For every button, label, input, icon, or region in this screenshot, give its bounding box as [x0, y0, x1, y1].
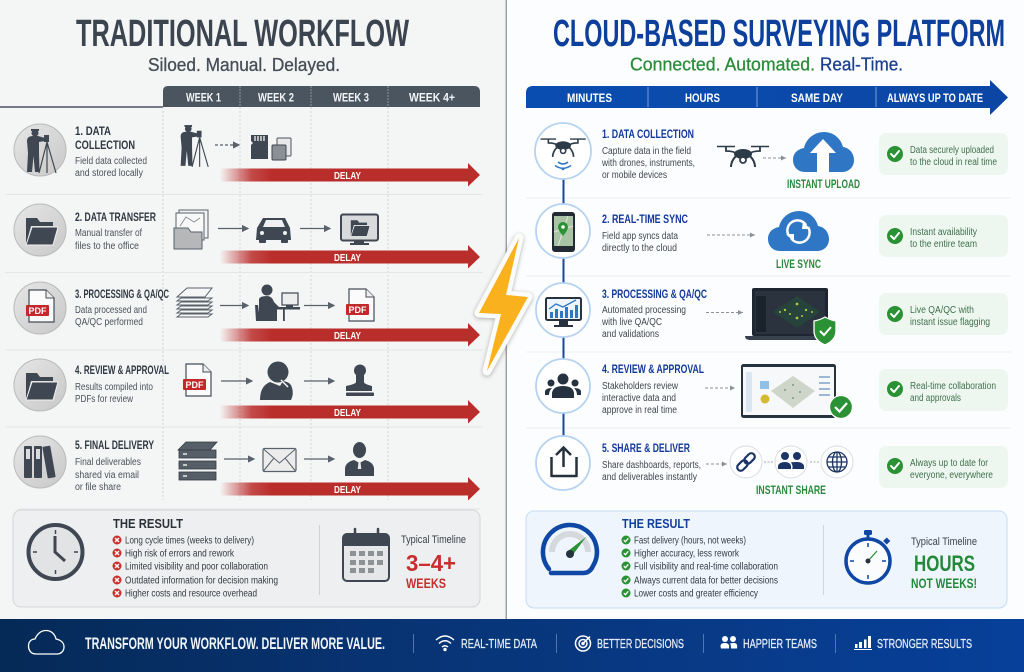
step description: or mobile devices — [602, 170, 667, 181]
result list: Fast delivery (hours, not weeks) — [634, 536, 746, 546]
benefit card — [879, 215, 1008, 257]
icon: sync cloud — [768, 211, 829, 251]
result list: Higher accuracy, less rework — [634, 548, 740, 560]
typical timeline value: HOURS — [914, 551, 975, 576]
icon: wifi — [436, 636, 454, 650]
icon: target — [576, 636, 590, 651]
left timeline header: WEEK 1 — [186, 90, 221, 104]
right timeline arrow — [526, 80, 1008, 115]
left row 5: final delivery — [14, 436, 480, 500]
right timeline arrow: SAME DAY — [791, 91, 843, 105]
left timeline header: WEEK 2 — [258, 90, 294, 104]
footer label: HAPPIER TEAMS — [743, 637, 817, 651]
right timeline arrow: HOURS — [685, 91, 720, 105]
panel: cloud result — [526, 511, 1007, 608]
icon: memory cards — [251, 135, 291, 160]
arrow — [300, 228, 330, 230]
arrow — [763, 157, 786, 159]
icon: pdf badge — [14, 282, 66, 334]
step description: and stored locally — [75, 168, 143, 179]
right row 2: real-time sync — [536, 204, 1008, 271]
step description: files to the office — [75, 241, 139, 252]
icon: drone badge — [535, 123, 591, 179]
benefit card: and approvals — [910, 393, 961, 404]
step heading: 3. PROCESSING & QA/QC — [75, 289, 169, 301]
arrow — [224, 458, 254, 460]
result list: Limited visibility and poor collaboration — [125, 562, 268, 572]
left row 1: data collection — [14, 124, 480, 186]
icon: lightning bolt — [479, 238, 528, 371]
icon: paper stack — [177, 288, 212, 317]
left panel background — [0, 0, 506, 620]
step description: Field app syncs data — [602, 231, 678, 242]
step description: Capture data in the field — [602, 146, 691, 157]
step heading: 4. REVIEW & APPROVAL — [602, 364, 704, 376]
benefit card: Data securely uploaded — [910, 145, 994, 156]
icon: phone badge — [536, 204, 590, 258]
step description: and validations — [602, 329, 659, 340]
left timeline header: WEEK 3 — [333, 90, 369, 104]
step heading: 3. PROCESSING & QA/QC — [602, 289, 707, 301]
step heading continued: COLLECTION — [75, 140, 135, 152]
icon: monitor with folder — [341, 214, 378, 245]
arrow — [220, 304, 248, 306]
icon: tablet dashboard with check — [741, 364, 852, 418]
icon: paper files — [174, 210, 208, 249]
benefit card: to the cloud in real time — [910, 157, 997, 168]
arrow — [706, 463, 727, 465]
delay arrow — [220, 323, 480, 346]
step heading: 2. DATA TRANSFER — [75, 212, 157, 224]
step heading: 1. DATA COLLECTION — [602, 129, 694, 141]
left row 3: processing — [14, 282, 480, 346]
benefit card: instant issue flagging — [910, 317, 990, 328]
arrow — [304, 304, 334, 306]
icon: drone — [717, 146, 769, 167]
result list — [622, 536, 778, 600]
step description: Share dashboards, reports, — [602, 460, 701, 471]
arrow — [221, 380, 252, 382]
step heading: 5. FINAL DELIVERY — [75, 440, 154, 452]
arrow — [304, 458, 334, 460]
step description: or file share — [75, 482, 121, 493]
typical timeline note: NOT WEEKS! — [911, 576, 977, 591]
step heading: 5. SHARE & DELIVER — [602, 443, 691, 455]
delay arrow: DELAY — [334, 330, 361, 342]
left title: TRADITIONAL WORKFLOW — [76, 13, 409, 55]
typical timeline unit: WEEKS — [406, 576, 446, 591]
callout label: INSTANT SHARE — [756, 485, 826, 497]
benefit card: to the entire team — [910, 239, 977, 250]
step description: QA/QC performed — [75, 317, 143, 328]
icon: envelope — [263, 448, 296, 472]
right subtitle: Real-Time. — [820, 54, 903, 74]
step description: and deliverables instantly — [602, 472, 697, 483]
icon: servers — [178, 442, 217, 480]
step description — [75, 457, 141, 493]
benefit card — [879, 293, 1008, 335]
footer label: BETTER DECISIONS — [597, 637, 684, 651]
step description: Stakeholders review — [602, 381, 679, 392]
right row 1: data collection — [535, 123, 1008, 191]
right row 4: review — [536, 359, 1008, 418]
step description: Manual transfer of — [75, 228, 142, 239]
icon: car — [256, 218, 291, 243]
icon: speed gauge — [543, 525, 597, 573]
icon: monitor chart badge — [536, 283, 590, 337]
icon: people — [720, 636, 737, 648]
step description — [602, 231, 678, 254]
arrow — [304, 380, 334, 382]
result list: Higher costs and resource overhead — [125, 588, 257, 600]
left row 4: review — [14, 359, 480, 424]
arrow — [215, 144, 239, 146]
icon: bars — [854, 636, 872, 650]
arrow — [707, 234, 755, 236]
delay arrow — [220, 245, 480, 268]
delay arrow: DELAY — [334, 170, 361, 182]
delay arrow — [220, 400, 480, 424]
step heading: 4. REVIEW & APPROVAL — [75, 365, 169, 377]
icon: folder badge — [14, 359, 66, 411]
step description: with live QA/QC — [601, 317, 662, 328]
benefit card — [879, 133, 1008, 175]
icon: thinking person — [260, 362, 293, 400]
benefit card: Live QA/QC with — [910, 305, 974, 316]
step description: PDFs for review — [75, 394, 134, 405]
step description: Data processed and — [75, 305, 147, 316]
typical timeline label: Typical Timeline — [911, 536, 977, 548]
step description — [75, 382, 153, 405]
step description — [75, 228, 142, 252]
benefit card: Instant availability — [910, 227, 977, 238]
icon: pdf — [183, 364, 211, 396]
icon: team badge — [536, 359, 590, 413]
icon: surveyor — [181, 125, 208, 167]
arrow — [706, 312, 743, 314]
step description — [602, 381, 679, 416]
icon: surveyor badge — [14, 124, 66, 176]
step heading: 1. DATA — [75, 126, 111, 138]
step description: shared via email — [75, 470, 139, 481]
icon: pdf — [346, 289, 374, 321]
icon: laptop with shield — [745, 288, 836, 345]
step description: approve in real time — [602, 405, 677, 416]
result heading: THE RESULT — [113, 517, 183, 531]
callout label: INSTANT UPLOAD — [787, 179, 860, 191]
callout label: LIVE SYNC — [776, 259, 821, 271]
icon: stopwatch — [846, 530, 890, 583]
result list: Lower costs and greater efficiency — [634, 588, 758, 600]
right subtitle: Connected. Automated. — [630, 54, 815, 74]
icon: folder badge — [14, 204, 66, 256]
footer label: STRONGER RESULTS — [877, 637, 972, 651]
benefit card — [879, 446, 1008, 488]
panel: traditional result — [13, 510, 480, 607]
icon: person at desk — [255, 284, 300, 321]
icon: business person — [345, 442, 374, 476]
right row 5: share — [536, 436, 1008, 497]
benefit card: everyone, everywhere — [910, 470, 993, 481]
step description — [75, 156, 147, 179]
step description — [601, 146, 695, 181]
step description: directly to the cloud — [602, 243, 677, 254]
typical timeline value: 3–4+ — [406, 550, 456, 576]
icon: link — [730, 446, 762, 478]
delay arrow — [220, 477, 480, 500]
icon: globe — [821, 446, 853, 478]
step heading: 2. REAL-TIME SYNC — [602, 214, 688, 226]
step description: Final deliverables — [75, 457, 141, 468]
icon: cloud outline — [28, 630, 64, 654]
benefit card — [879, 369, 1008, 411]
icon: clock — [28, 525, 82, 579]
icon: binders badge — [14, 436, 66, 488]
delay arrow — [220, 163, 480, 186]
delay arrow: DELAY — [334, 252, 361, 264]
step description: Results compiled into — [75, 382, 153, 393]
timeline connector — [562, 175, 564, 440]
step description — [601, 305, 686, 340]
icon: calendar — [343, 529, 389, 581]
result list: High risk of errors and rework — [125, 548, 235, 560]
step description: Automated processing — [602, 305, 686, 316]
icon: share badge — [536, 436, 590, 490]
result heading: THE RESULT — [622, 517, 690, 531]
step description: with drones, instruments, — [601, 158, 695, 169]
step description — [75, 305, 147, 328]
right timeline arrow: ALWAYS UP TO DATE — [887, 91, 983, 105]
result list: Long cycle times (weeks to delivery) — [125, 536, 254, 546]
step description: interactive data and — [602, 393, 676, 404]
right panel background — [507, 0, 1024, 620]
result list — [112, 536, 278, 600]
result list: Full visibility and real-time collaboration — [634, 562, 778, 572]
result list: Outdated information for decision making — [125, 576, 278, 586]
arrow — [218, 228, 248, 230]
icon: people — [775, 446, 807, 478]
footer label: REAL-TIME DATA — [461, 637, 537, 651]
centre divider — [506, 0, 507, 620]
typical timeline label: Typical Timeline — [401, 534, 466, 546]
left timeline header — [0, 86, 482, 107]
footer slogan: TRANSFORM YOUR WORKFLOW. DELIVER MORE VALUE. — [85, 635, 385, 653]
right timeline arrow: MINUTES — [567, 91, 612, 105]
icon: upload cloud — [793, 132, 854, 172]
footer banner — [0, 619, 1024, 672]
left timeline header: WEEK 4+ — [409, 90, 455, 104]
left row 2: data transfer — [14, 204, 480, 268]
left subtitle: Siloed. Manual. Delayed. — [148, 54, 340, 75]
delay arrow: DELAY — [334, 407, 361, 419]
delay arrow: DELAY — [334, 484, 361, 496]
step description — [602, 460, 701, 483]
step description: Field data collected — [75, 156, 147, 167]
icon: stamp — [346, 364, 374, 396]
arrow — [705, 387, 735, 389]
benefit card: Real-time collaboration — [910, 381, 996, 392]
right row 3: processing — [536, 283, 1008, 345]
benefit card: Always up to date for — [910, 458, 989, 469]
result list: Always current data for better decisions — [634, 576, 778, 586]
